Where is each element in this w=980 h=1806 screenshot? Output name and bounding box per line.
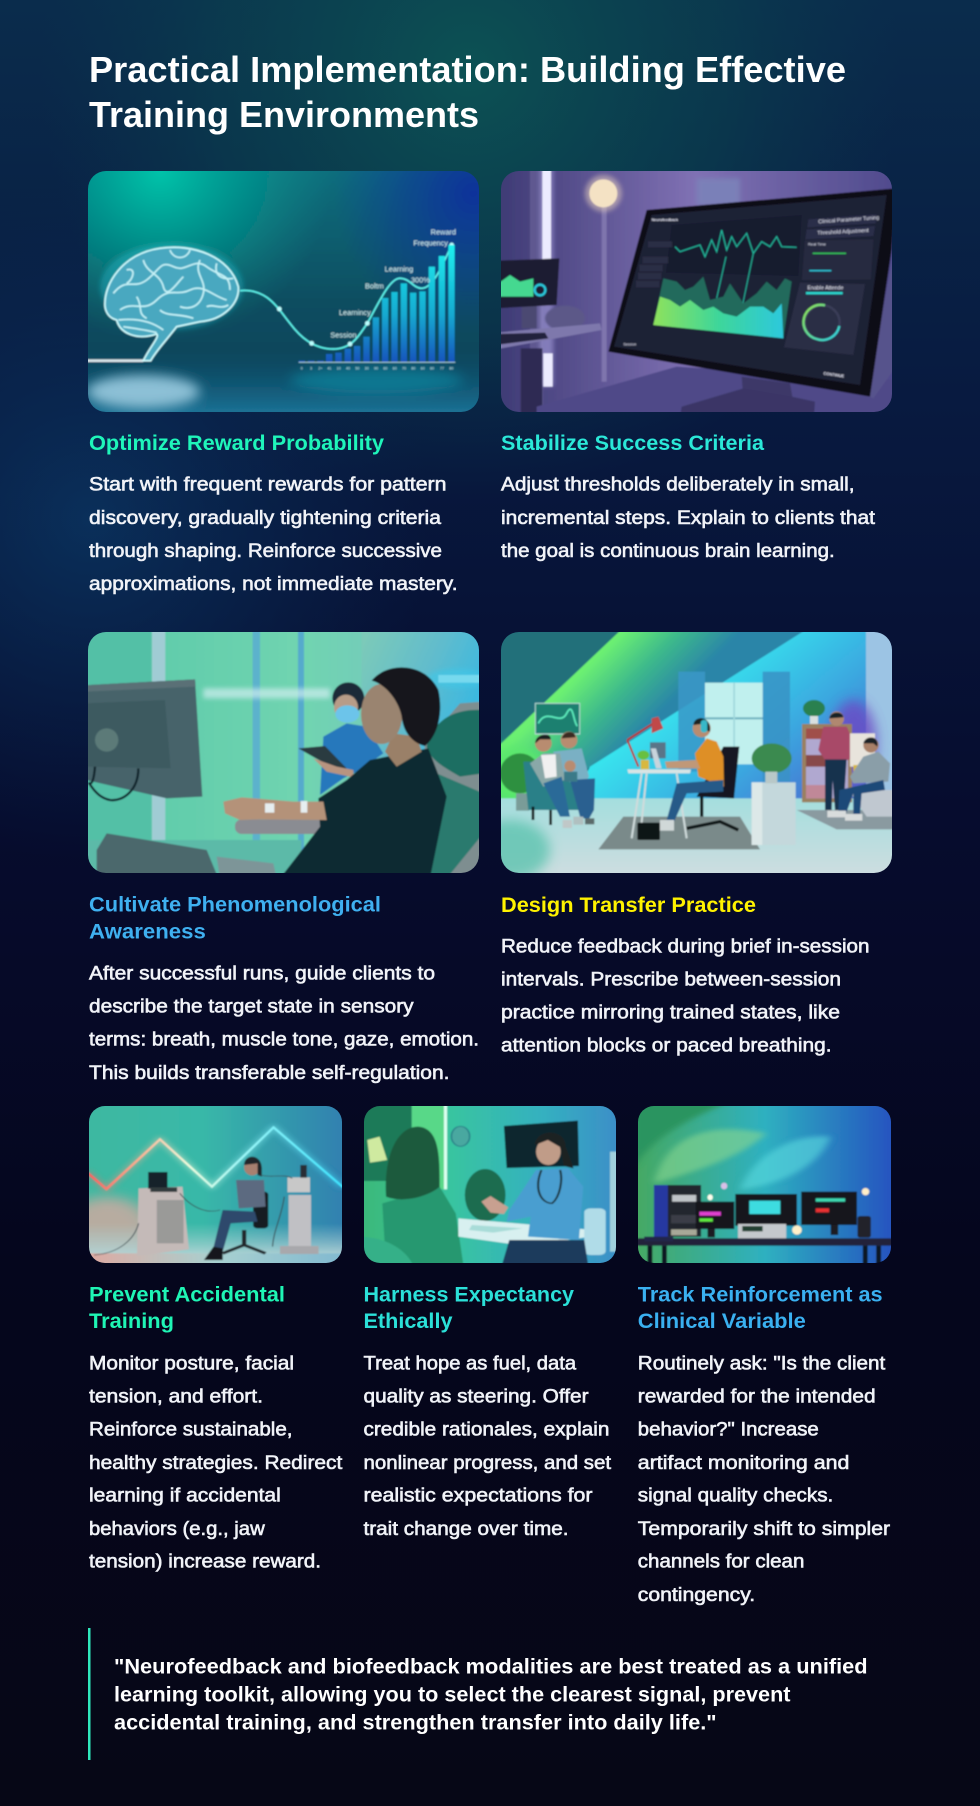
wave line xyxy=(675,230,797,257)
image: desk with signal monitors xyxy=(632,1101,897,1267)
callout: closing quote xyxy=(88,1628,868,1760)
title: Practical Implementation: Building Effective xyxy=(89,49,846,90)
body text xyxy=(501,936,870,1057)
body text xyxy=(364,1354,612,1540)
title: Training Environments xyxy=(89,94,479,135)
chart labels: Reward xyxy=(431,228,456,237)
body text: trait change over time. xyxy=(364,1519,568,1540)
table xyxy=(632,1237,897,1267)
chart labels: Learning xyxy=(385,265,413,274)
desk xyxy=(457,1217,586,1245)
chart labels: Boltm xyxy=(365,281,384,290)
body text: terms: breath, muscle tone, gaze, emotion. xyxy=(89,1030,479,1051)
panel: optimize reward probability xyxy=(83,166,483,595)
body text: learning if accidental xyxy=(89,1486,281,1507)
monitor back xyxy=(83,679,202,800)
mixer xyxy=(738,1224,786,1240)
reward curve xyxy=(240,243,454,349)
chart labels: 300% xyxy=(411,275,430,284)
panel: cultivate phenomenological awareness xyxy=(83,628,487,1084)
brain xyxy=(100,243,243,361)
left cabinet xyxy=(137,1172,189,1256)
chart axis numbers: 60 xyxy=(383,366,387,370)
heading xyxy=(89,1282,285,1333)
chart axis numbers: 60 xyxy=(393,366,397,370)
chart labels xyxy=(330,228,456,339)
heading: Awareness xyxy=(89,920,206,944)
chart axis numbers: 2+ xyxy=(318,366,323,370)
chart labels: Frequency xyxy=(413,239,448,248)
body text: Reinforce sustainable, xyxy=(89,1420,292,1441)
chart labels: Session xyxy=(330,330,356,339)
chart axis numbers: 80 xyxy=(411,366,415,370)
panel: harness expectancy ethically xyxy=(358,1101,623,1540)
body text: discovery, gradually tightening criteria xyxy=(89,508,441,529)
monitor: Enable Attende xyxy=(807,285,844,291)
heading: Stabilize Success Criteria xyxy=(501,431,765,455)
chart axis numbers: 70 xyxy=(402,366,406,370)
body text: practice mirroring trained states, like xyxy=(501,1003,840,1024)
right panels xyxy=(807,214,877,227)
console xyxy=(97,833,277,878)
chart axis numbers: 80 xyxy=(449,366,453,370)
chart axis numbers: 90 xyxy=(374,366,378,370)
heading xyxy=(364,1282,574,1333)
heading xyxy=(638,1282,883,1333)
body text: tension, and effort. xyxy=(89,1387,263,1408)
image: clinician talking with client at desk xyxy=(358,1101,623,1267)
chart axis numbers: 30 xyxy=(365,366,369,370)
side table with plant xyxy=(752,743,796,845)
body text: Monitor posture, facial xyxy=(89,1354,294,1374)
chart axis numbers: 60 xyxy=(421,366,425,370)
chart labels: Learnincy xyxy=(339,308,371,317)
body text: describe the target state in sensory xyxy=(89,997,414,1018)
bookshelf and standing person xyxy=(802,700,858,810)
body text: realistic expectations for xyxy=(364,1486,593,1507)
equipment rack xyxy=(654,1185,701,1238)
heading: Optimize Reward Probability xyxy=(89,431,384,455)
body text: channels for clean xyxy=(638,1552,804,1573)
body text: artifact monitoring and xyxy=(638,1453,849,1474)
heading: Clinical Variable xyxy=(638,1309,806,1333)
monitor: Neurofeedback xyxy=(652,218,679,222)
chart axis numbers: 77 xyxy=(440,366,444,370)
window and curtains xyxy=(678,672,790,782)
chart axis numbers xyxy=(301,366,453,370)
body text xyxy=(89,474,457,595)
body text xyxy=(89,1354,343,1573)
monitor: CONTINUE xyxy=(823,371,845,379)
image: clinical dashboard on monitor in purple room xyxy=(496,166,896,417)
chart axis numbers: 40 xyxy=(346,366,350,370)
heading: Harness Expectancy xyxy=(364,1282,574,1306)
chart axis numbers: 50 xyxy=(355,366,359,370)
doctor xyxy=(481,1133,606,1267)
image: seated woman with neon zigzag and equipment xyxy=(89,1106,342,1263)
body text: rewarded for the intended xyxy=(638,1387,876,1408)
panel: prevent accidental training xyxy=(88,1106,342,1572)
body text: attention blocks or paced breathing. xyxy=(501,1036,832,1057)
panel: stabilize success criteria xyxy=(496,166,896,562)
body text: Reduce feedback during brief in-session xyxy=(501,936,870,958)
client xyxy=(223,667,447,878)
body text: Adjust thresholds deliberately in small, xyxy=(501,474,854,496)
body text: healthy strategies. Redirect xyxy=(89,1453,343,1474)
title xyxy=(89,49,846,135)
chair xyxy=(235,702,483,878)
body text: After successful runs, guide clients to xyxy=(89,964,435,984)
heading: Ethically xyxy=(364,1309,453,1333)
wall art xyxy=(535,703,580,734)
heading: Training xyxy=(89,1309,174,1333)
body text: nonlinear progress, and set xyxy=(364,1453,612,1474)
callout: closing quote: learning toolkit, allowing you to select the clearest signal, prevent xyxy=(114,1682,790,1706)
panel: track reinforcement as clinical variable xyxy=(632,1101,897,1606)
body text: quality as steering. Offer xyxy=(364,1387,589,1408)
panel: design transfer practice xyxy=(470,628,896,1057)
body text: behaviors (e.g., jaw xyxy=(89,1519,265,1540)
image: home practice room with people xyxy=(501,632,892,873)
heading: Track Reinforcement as xyxy=(638,1282,883,1306)
area chart xyxy=(653,277,792,338)
client seen from behind xyxy=(358,1127,464,1267)
body text: Temporarily shift to simpler xyxy=(638,1519,891,1540)
heading xyxy=(89,892,381,944)
lamps and speaker xyxy=(707,1183,871,1238)
right tower xyxy=(280,1165,319,1254)
heading: Cultivate Phenomenological xyxy=(89,892,381,916)
body text: Routinely ask: "Is the client xyxy=(638,1354,886,1374)
body text: credible rationales, explain xyxy=(364,1420,609,1441)
image: glowing brain linked to reward bar chart xyxy=(83,166,483,417)
chart axis numbers: 10 xyxy=(337,366,341,370)
body text: through shaping. Reinforce successive xyxy=(89,541,442,562)
body text: incremental steps. Explain to clients that xyxy=(501,508,876,529)
body text: Start with frequent rewards for pattern xyxy=(89,474,446,496)
monitor: Threshold Adjustment xyxy=(817,228,869,237)
body text: signal quality checks. xyxy=(638,1486,833,1507)
neon zigzag xyxy=(86,1127,343,1189)
monitor xyxy=(608,188,896,398)
chart axis numbers: 0 xyxy=(301,366,303,370)
monitor: Real Time xyxy=(808,242,827,247)
couch and seated person xyxy=(797,733,896,829)
callout: closing quote: "Neurofeedback and biofeedback modalities are best treated as a unified xyxy=(114,1654,868,1678)
monitors xyxy=(696,1192,857,1237)
body text: behavior?" Increase xyxy=(638,1420,819,1441)
image: seated client with clinician and monitor xyxy=(83,628,487,878)
body text: tension) increase reward. xyxy=(89,1552,321,1573)
callout: closing quote: accidental training, and strengthen transfer into daily life." xyxy=(114,1710,717,1734)
body text: Treat hope as fuel, data xyxy=(364,1354,577,1374)
body text: the goal is continuous brain learning. xyxy=(501,541,835,562)
chart axis numbers: 60 xyxy=(430,366,434,370)
clinician xyxy=(298,682,383,795)
body text: contingency. xyxy=(638,1585,755,1606)
body text: intervals. Prescribe between-session xyxy=(501,970,841,990)
woman on chair xyxy=(204,1157,268,1260)
body text xyxy=(638,1354,891,1606)
desk with worker xyxy=(598,717,760,849)
background laptop xyxy=(496,258,559,328)
body text: This builds transferable self-regulation. xyxy=(89,1063,450,1084)
bar chart xyxy=(299,245,455,362)
monitor: Clinical Parameter Tuning xyxy=(818,215,879,225)
couple on armchair xyxy=(500,732,595,828)
body text: approximations, not immediate mastery. xyxy=(89,574,457,595)
heading: Prevent Accidental xyxy=(89,1282,285,1306)
chart axis numbers: 41 xyxy=(327,366,331,370)
chart axis numbers: 3 xyxy=(310,366,312,370)
heading: Design Transfer Practice xyxy=(501,893,756,917)
monitor: Session xyxy=(623,342,636,346)
body text xyxy=(89,964,479,1084)
body text xyxy=(501,474,876,562)
